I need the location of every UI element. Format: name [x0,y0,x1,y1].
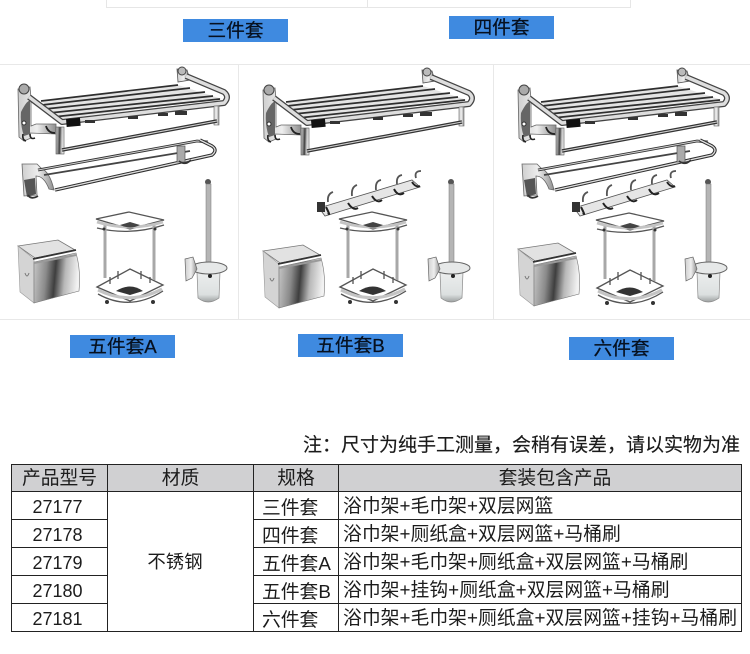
specification table: 五件套A [262,553,331,574]
specification table: 浴巾架+毛巾架+厕纸盒+双层网篮+马桶刷 [343,550,688,572]
label: four piece set [449,16,554,39]
icon: paper box [518,243,580,306]
specification table: 27178 [32,525,83,545]
panel outlines [0,64,750,320]
specification table: 27180 [32,581,83,601]
specification table: 浴巾架+挂钩+厕纸盒+双层网篮+马桶刷 [343,578,670,600]
icon: paper box [18,240,80,303]
label: five piece set B: 五件套B [316,335,385,356]
label: five piece set B [298,334,403,357]
label: four piece set: 四件套 [473,17,530,38]
specification table: 浴巾架+毛巾架+厕纸盒+双层网篮+挂钩+马桶刷 [343,606,737,628]
icon: towel bar [522,140,715,198]
note text: 注：尺寸为纯手工测量，会稍有误差，请以实物为准 [303,435,740,456]
icon: corner basket [96,212,164,304]
icon: robe hooks [317,171,421,216]
icon: toilet brush [185,179,227,302]
specification table: 不锈钢 [147,550,203,572]
specification table: 浴巾架+毛巾架+双层网篮 [343,494,553,516]
specification table: 五件套B [262,581,331,602]
label: five piece set A: 五件套A [88,336,157,357]
panel: five piece set B products [263,68,472,308]
specification table: 六件套 [262,609,318,630]
panel: five piece set A products [18,67,227,304]
panel: six piece set products [518,68,727,306]
label: five piece set A [70,335,175,358]
specification table: 浴巾架+厕纸盒+双层网篮+马桶刷 [343,522,621,544]
specification table: 规格 [277,467,315,488]
label: six piece set [569,337,674,360]
icon: towel rack [518,68,727,155]
icon: paper box [263,245,325,308]
label: three piece set: 三件套 [207,20,264,41]
icon: towel rack [18,67,227,154]
icon: corner basket [339,212,407,304]
specification table [11,464,742,632]
specification table: 三件套 [262,497,318,518]
icon: corner basket [596,213,664,305]
icon: towel bar [22,140,215,198]
specification table: 27179 [32,553,83,573]
top panels [106,0,630,8]
icon: toilet brush [685,179,727,302]
label: six piece set: 六件套 [593,338,650,359]
icon: towel rack [263,68,472,155]
specification table: 27177 [32,497,83,517]
label: three piece set [183,19,288,42]
specification table: 套装包含产品 [499,467,611,488]
specification table: 产品型号 [22,467,97,488]
icon: toilet brush [428,179,470,302]
icon: robe hooks [572,171,676,216]
specification table: 27181 [32,609,83,629]
specification table: 四件套 [262,525,318,546]
specification table: 材质 [162,467,199,488]
